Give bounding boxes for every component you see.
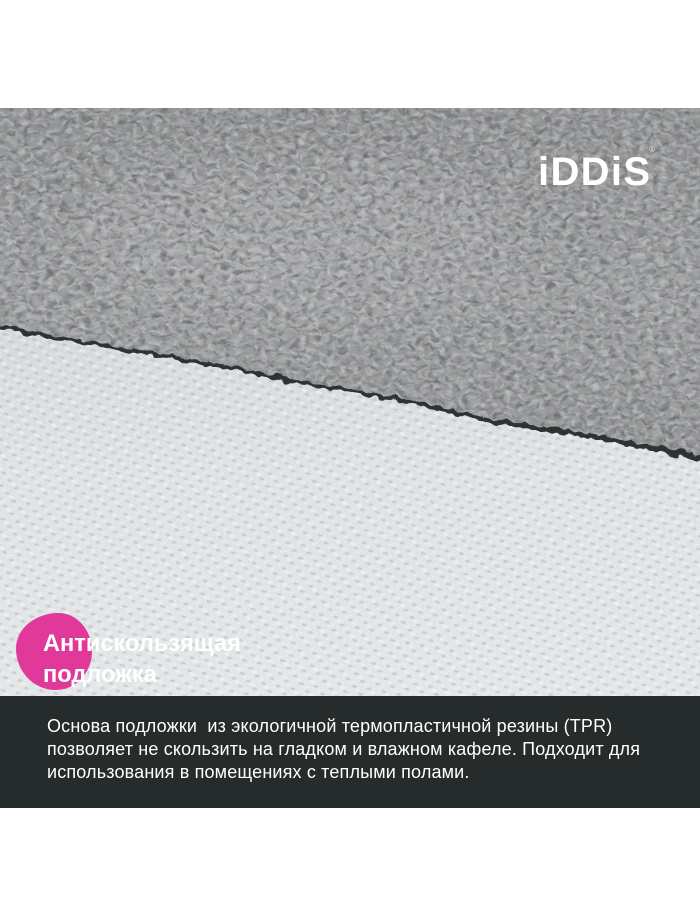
shaggy pile with shadow edge <box>0 90 700 470</box>
knit backing <box>0 320 700 696</box>
logo: iDDiS: iDDiS <box>538 150 650 194</box>
heading <box>43 631 241 688</box>
photo: bath mat with shaggy pile and knit backing <box>0 108 700 696</box>
dark caption band <box>0 696 700 808</box>
caption text: Основа подложки из экологичной термопластичной резины (TPR) позволяет не скользить на гладком и влажном кафеле. Подходит для использования в помещениях с теплыми полами. <box>47 716 640 782</box>
pink badge blob <box>16 613 92 690</box>
heading: Антискользящая <box>43 631 241 657</box>
logo: iDDiS: ® <box>649 145 655 154</box>
heading: подложка <box>43 662 157 688</box>
